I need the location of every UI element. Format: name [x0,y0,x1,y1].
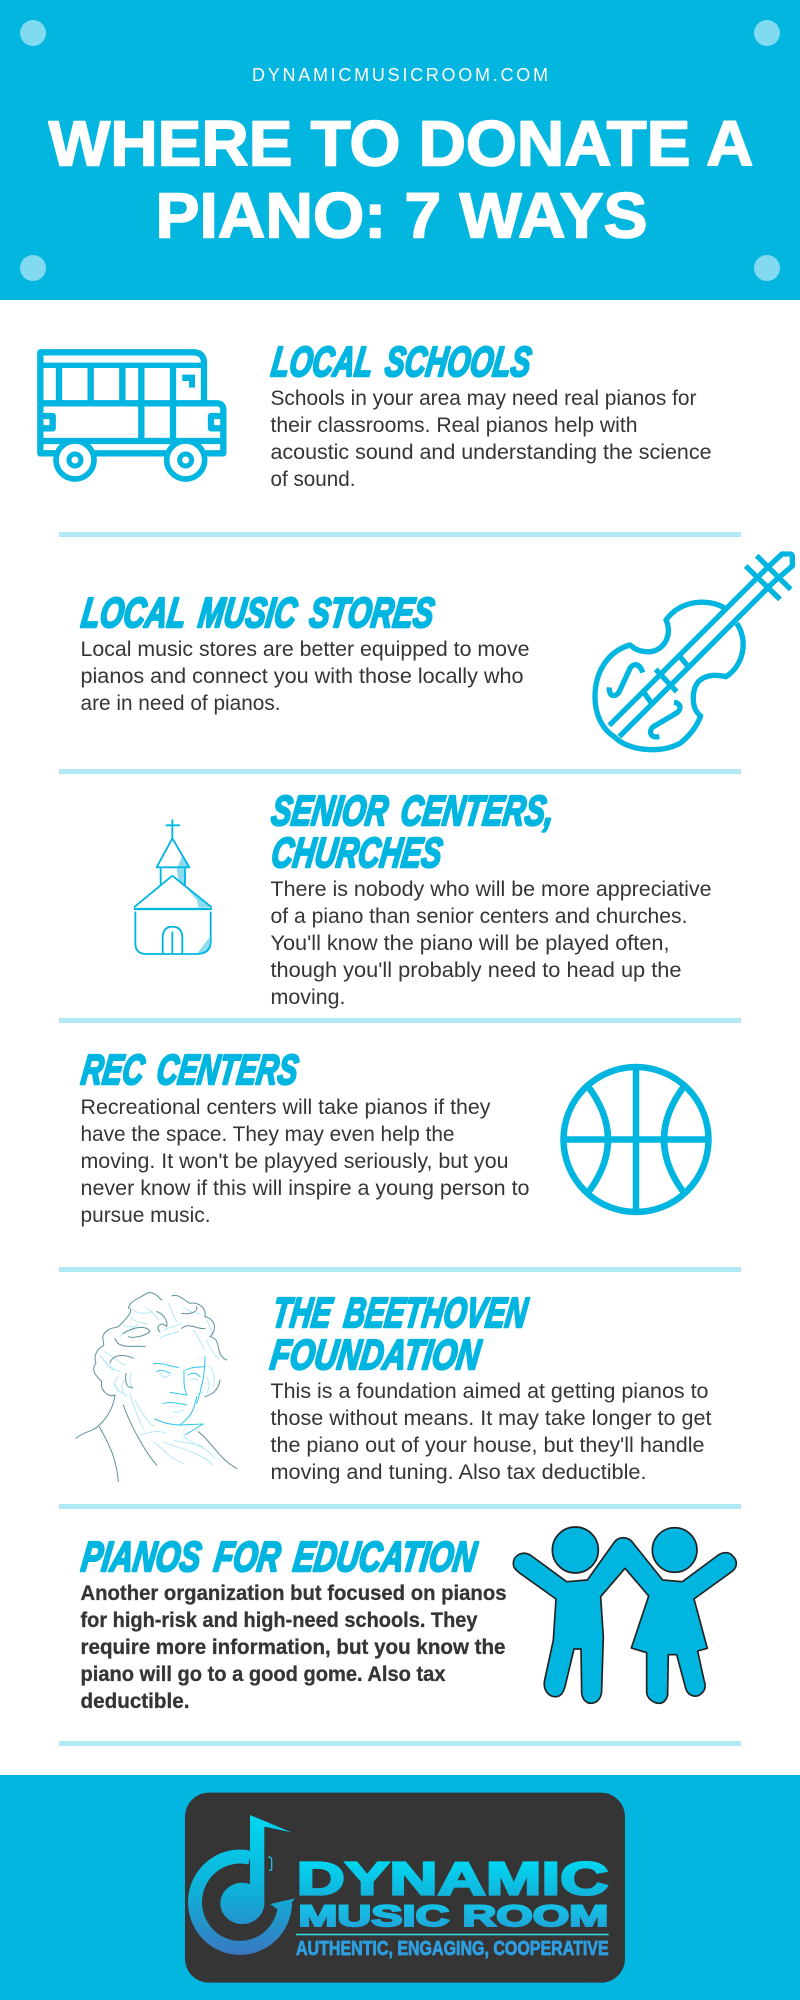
logo wordmark: DYNAMIC [297,1852,608,1904]
text: senior centers body [270,878,712,1009]
text: senior centers body: moving. [270,986,346,1009]
heading: senior centers, churches: SENIOR CENTERS, [269,787,557,834]
heading: local schools: LOCAL SCHOOLS [269,338,534,385]
text: local schools body: Schools in your area may need real pianos for [270,387,696,410]
icon: two children holding hands [513,1527,736,1703]
text: pianos for education body [80,1582,506,1713]
text: local music stores body: pianos and connect you with those locally who [80,665,524,688]
text: beethoven foundation body: moving and tuning. Also tax deductible. [270,1461,646,1484]
title: WHERE TO DONATE A [48,108,754,180]
icon: school bus [40,352,223,479]
panel: rec centers [79,1046,709,1227]
text: local music stores body [80,638,530,715]
text: rec centers body: have the space. They may even help the [80,1123,454,1146]
heading: the beethoven foundation [268,1289,531,1378]
text: senior centers body: There is nobody who will be more appreciative [270,878,712,901]
logo mark: music note in ring [195,1815,295,1948]
footer banner [0,1775,800,2000]
text: pianos for education body: require more information, but you know the [80,1636,506,1659]
text: senior centers body: You'll know the piano will be played often, [270,932,670,955]
text: rec centers body: Recreational centers will take pianos if they [80,1096,491,1119]
heading: the beethoven foundation: THE BEETHOVEN [270,1289,531,1336]
text: local music stores body: Local music stores are better equipped to move [80,638,530,661]
icon: violin [595,554,792,750]
logo wordmark: AUTHENTIC, ENGAGING, COOPERATIVE [296,1938,609,1960]
logo wordmark: MUSIC ROOM [298,1900,608,1933]
title: PIANO: 7 WAYS [156,180,648,252]
panel: local music stores [79,554,792,750]
heading: local music stores: LOCAL MUSIC STORES [79,589,437,636]
heading: pianos for education: PIANOS FOR EDUCATION [79,1533,480,1580]
logo panel [185,1793,625,1983]
icon: church [134,819,212,954]
panel: the beethoven foundation [76,1289,712,1484]
text: beethoven foundation body: those without means. It may take longer to get [270,1407,712,1430]
logo wordmark [296,1852,609,1960]
text: beethoven foundation body [270,1380,712,1484]
icon: basketball [563,1067,709,1212]
site name: DYNAMICMUSICROOM.COM [252,65,548,85]
text: senior centers body: of a piano than senior centers and churches. [270,905,688,928]
text: local schools body: of sound. [270,468,356,491]
panel: pianos for education [79,1527,736,1713]
text: local music stores body: are in need of pianos. [80,692,280,715]
text: senior centers body: though you'll probably need to head up the [270,959,682,982]
text: local schools body: acoustic sound and understanding the science [270,441,712,464]
icon: beethoven portrait sketch [76,1293,237,1482]
text: rec centers body [80,1096,530,1227]
text: pianos for education body: Another organization but focused on pianos [80,1582,506,1605]
text: pianos for education body: for high-risk and high-need schools. They [80,1609,478,1632]
heading: the beethoven foundation: FOUNDATION [268,1331,484,1378]
panel: local schools [40,338,711,491]
text: local schools body: their classrooms. Real pianos help with [270,414,638,437]
text: rec centers body: moving. It won't be playyed seriously, but you [80,1150,508,1173]
text: rec centers body: pursue music. [80,1204,210,1227]
text: pianos for education body: piano will go to a good gome. Also tax [80,1663,446,1686]
title [48,108,754,252]
heading: rec centers: REC CENTERS [79,1046,301,1093]
panel: senior centers, churches [134,787,711,1009]
heading: senior centers, churches [269,787,557,876]
header banner [0,0,800,300]
text: pianos for education body: deductible. [80,1690,190,1713]
heading: senior centers, churches: CHURCHES [269,829,445,876]
text: rec centers body: never know if this will inspire a young person to [80,1177,530,1200]
text: beethoven foundation body: This is a foundation aimed at getting pianos to [270,1380,708,1403]
text: beethoven foundation body: the piano out of your house, but they'll handle [270,1434,704,1457]
text: local schools body [270,387,712,491]
